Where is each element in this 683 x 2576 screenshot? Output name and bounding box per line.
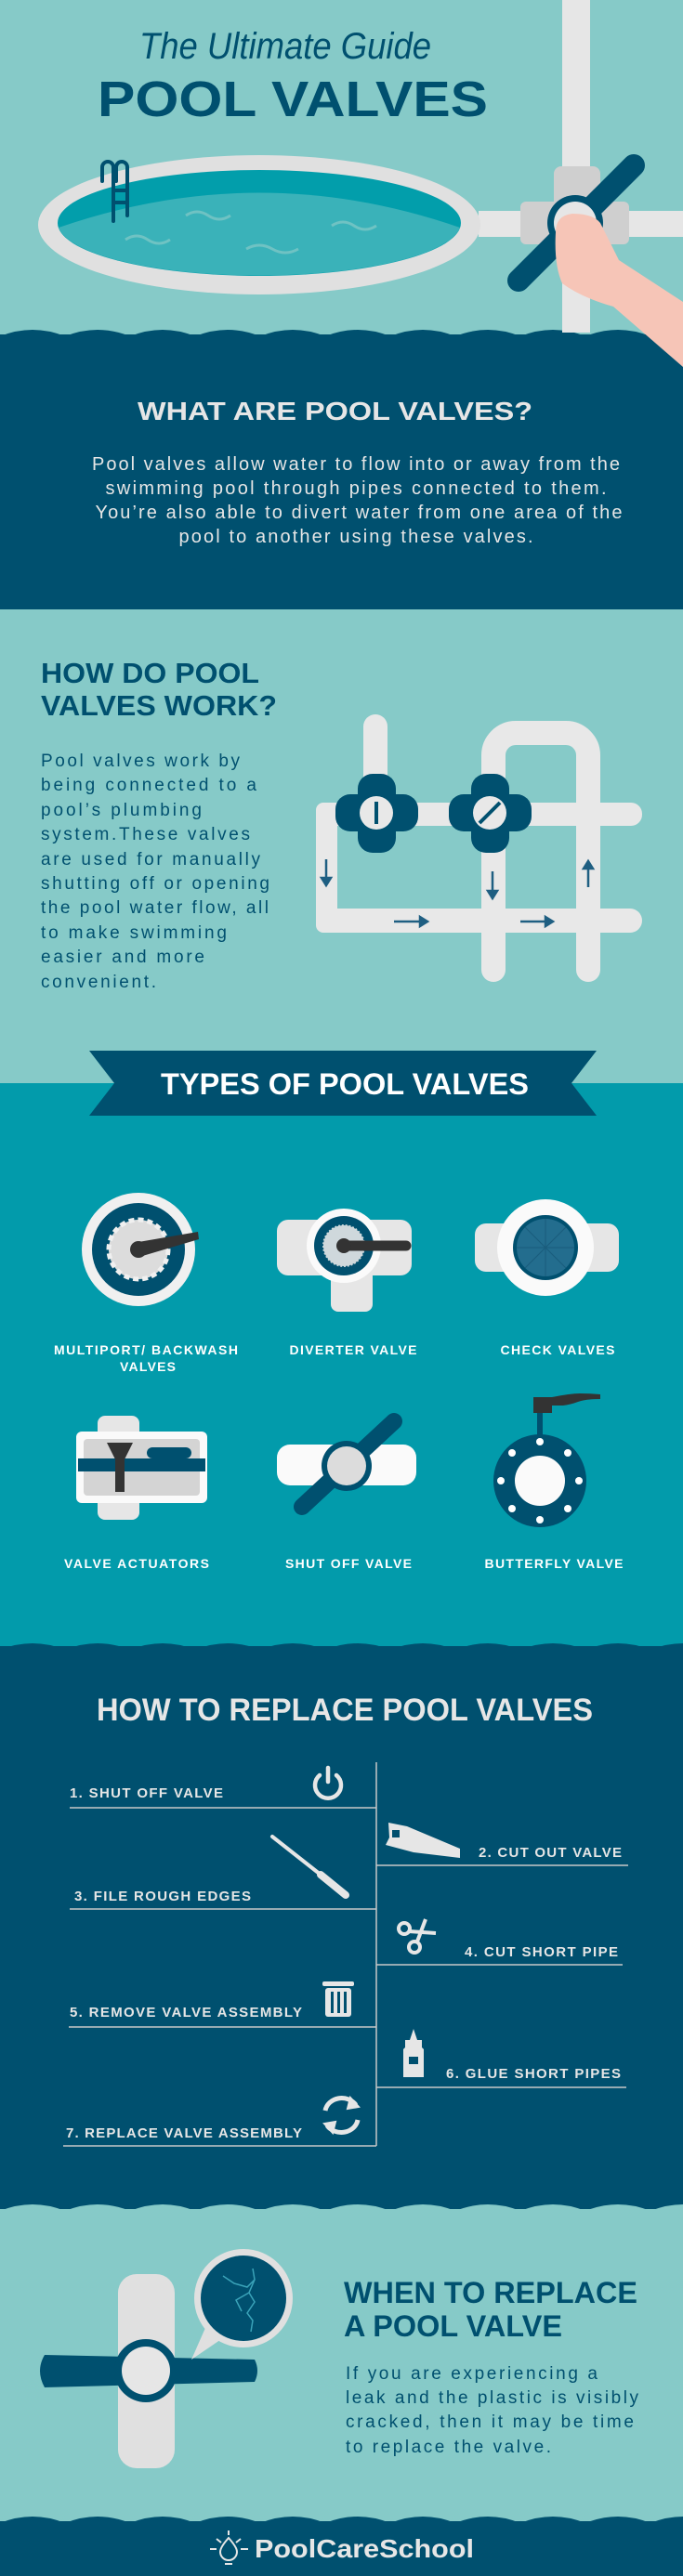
footer logo: PoolCareSchool	[255, 2534, 474, 2563]
labels row 2: SHUT OFF VALVE	[285, 1556, 412, 1571]
text block: how they work	[41, 752, 269, 992]
text block: when to replace	[346, 2364, 639, 2457]
title: The Ultimate Guide	[139, 26, 431, 67]
pipe diagram	[316, 714, 642, 970]
steps timeline: 7. REPLACE VALVE ASSEMBLY	[66, 2125, 302, 2141]
text block: how they work: convenient.	[41, 973, 156, 992]
icon: trash	[322, 1981, 354, 2017]
icon: shut off valve	[277, 1421, 416, 1507]
labels row 2: VALVE ACTUATORS	[64, 1556, 209, 1571]
title	[98, 26, 488, 127]
labels row 1: DIVERTER VALVE	[290, 1342, 416, 1357]
text block: when to replace: leak and the plastic is visibly	[346, 2388, 639, 2408]
labels row 2: BUTTERFLY VALVE	[485, 1556, 623, 1571]
icon: glue	[403, 2029, 424, 2077]
title: POOL VALVES	[98, 72, 488, 127]
text block: how they work: to make swimming	[41, 923, 227, 943]
speech bubble with crack	[191, 2249, 293, 2360]
ribbon: types of pool valves	[89, 1051, 597, 1116]
icon: saw	[386, 1823, 460, 1858]
steps timeline: 2. CUT OUT VALVE	[479, 1845, 622, 1861]
icon: butterfly valve	[493, 1393, 600, 1527]
text block: what are: Pool valves allow water to flow into or away from the	[92, 454, 620, 475]
steps timeline: 5. REMOVE VALVE ASSEMBLY	[70, 2005, 302, 2020]
icon: multiport valve	[82, 1193, 199, 1306]
text block: how they work: the pool water flow, all	[41, 898, 269, 918]
heading: when to replace	[344, 2276, 637, 2343]
labels row 1: MULTIPORT/ BACKWASH	[54, 1342, 238, 1357]
heading: how do pool valves work: VALVES WORK?	[41, 689, 277, 722]
text block: when to replace: If you are experiencing a	[346, 2364, 598, 2384]
steps timeline: 4. CUT SHORT PIPE	[465, 1944, 618, 1960]
steps timeline: 1. SHUT OFF VALVE	[70, 1785, 223, 1801]
heading: how to replace: HOW TO REPLACE POOL VALVES	[97, 1693, 593, 1728]
heading: what are pool valves: WHAT ARE POOL VALVES?	[138, 397, 532, 425]
text block: when to replace: cracked, then it may be time	[346, 2413, 634, 2432]
ribbon: types of pool valves: TYPES OF POOL VALVES	[161, 1067, 529, 1101]
labels row 2	[64, 1556, 623, 1571]
cracked valve illustration	[40, 2249, 293, 2468]
text block: what are: You’re also able to divert water from one area of the	[95, 503, 622, 523]
text block: how they work: system.These valves	[41, 825, 250, 844]
text block: how they work: being connected to a	[41, 776, 256, 795]
text block: when to replace: to replace the valve.	[346, 2438, 551, 2457]
text block: how they work: shutting off or opening	[41, 874, 269, 894]
icon: ladder	[102, 162, 127, 221]
steps timeline: 3. FILE ROUGH EDGES	[74, 1889, 251, 1904]
valve 2	[449, 774, 532, 853]
heading: when to replace: A POOL VALVE	[344, 2309, 562, 2343]
arrows	[322, 859, 593, 926]
labels row 1	[54, 1342, 615, 1374]
labels row 1: VALVES	[120, 1359, 176, 1374]
labels row 1: CHECK VALVES	[500, 1342, 615, 1357]
heading: how do pool valves work: HOW DO POOL	[41, 657, 259, 689]
icon: check valve	[475, 1199, 619, 1296]
icon: valve actuator	[76, 1416, 207, 1520]
text block: what are: swimming pool through pipes connected to them.	[106, 478, 607, 499]
heading: how do pool valves work	[41, 657, 277, 722]
icon: diverter valve	[277, 1209, 412, 1312]
steps timeline: 6. GLUE SHORT PIPES	[446, 2066, 621, 2082]
valve with hand	[519, 165, 683, 367]
valve 1	[335, 774, 418, 853]
steps timeline	[63, 1762, 628, 2146]
icon: refresh	[324, 2098, 359, 2133]
text block: what are: pool to another using these valves.	[178, 527, 533, 547]
icon: file	[272, 1837, 346, 1895]
footer logo	[210, 2530, 474, 2564]
text block: what are	[92, 454, 622, 547]
icon: power	[315, 1768, 341, 1798]
icon: scissors	[399, 1919, 436, 1953]
text block: how they work: pool’s plumbing	[41, 801, 202, 820]
text block: how they work: are used for manually	[41, 850, 260, 870]
text block: how they work: Pool valves work by	[41, 752, 240, 771]
heading: when to replace: WHEN TO REPLACE	[344, 2276, 637, 2309]
hero pool illustration	[38, 0, 683, 367]
text block: how they work: easier and more	[41, 948, 204, 967]
